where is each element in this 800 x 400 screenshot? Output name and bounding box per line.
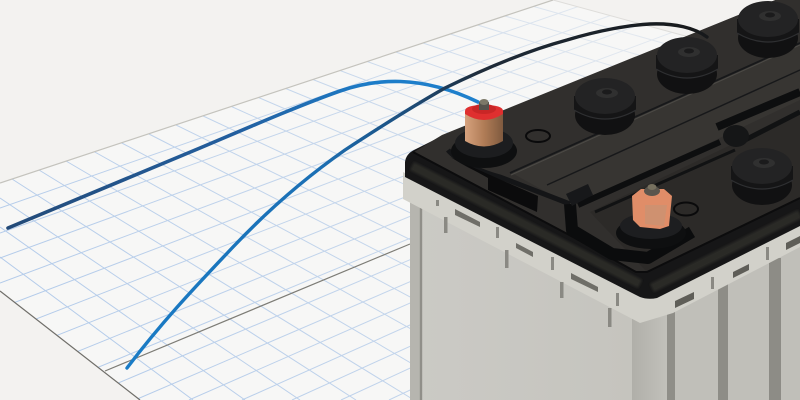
blue and black wire to far cell [127,24,707,368]
vent caps [574,1,799,205]
channel bar [578,142,720,205]
red positive terminal [451,99,517,168]
vent cap 3 [737,1,799,58]
lower right deck [590,112,800,272]
raised plate [510,43,800,205]
vent cap 1 [574,78,636,135]
battery casing [403,172,800,400]
right ribbed casing face [632,235,800,400]
blue wire to red terminal [8,81,478,228]
wire channel and recess [448,150,570,204]
vent ring right [674,202,698,216]
left edge stripe [410,195,422,400]
vent ring left [526,130,550,142]
lip of cover [405,0,800,299]
top surface [414,0,800,272]
vent cap 4 [731,148,793,205]
vent cap 2 [656,37,718,94]
top ridges [510,43,800,173]
battery top cover [405,0,800,299]
casing collar [403,172,800,323]
lip top highlight [413,152,800,272]
speckled front lip [412,166,800,288]
collar ticks and slots [436,200,800,327]
orange negative terminal [616,184,686,249]
small knob [723,125,749,147]
left casing face [410,195,634,400]
